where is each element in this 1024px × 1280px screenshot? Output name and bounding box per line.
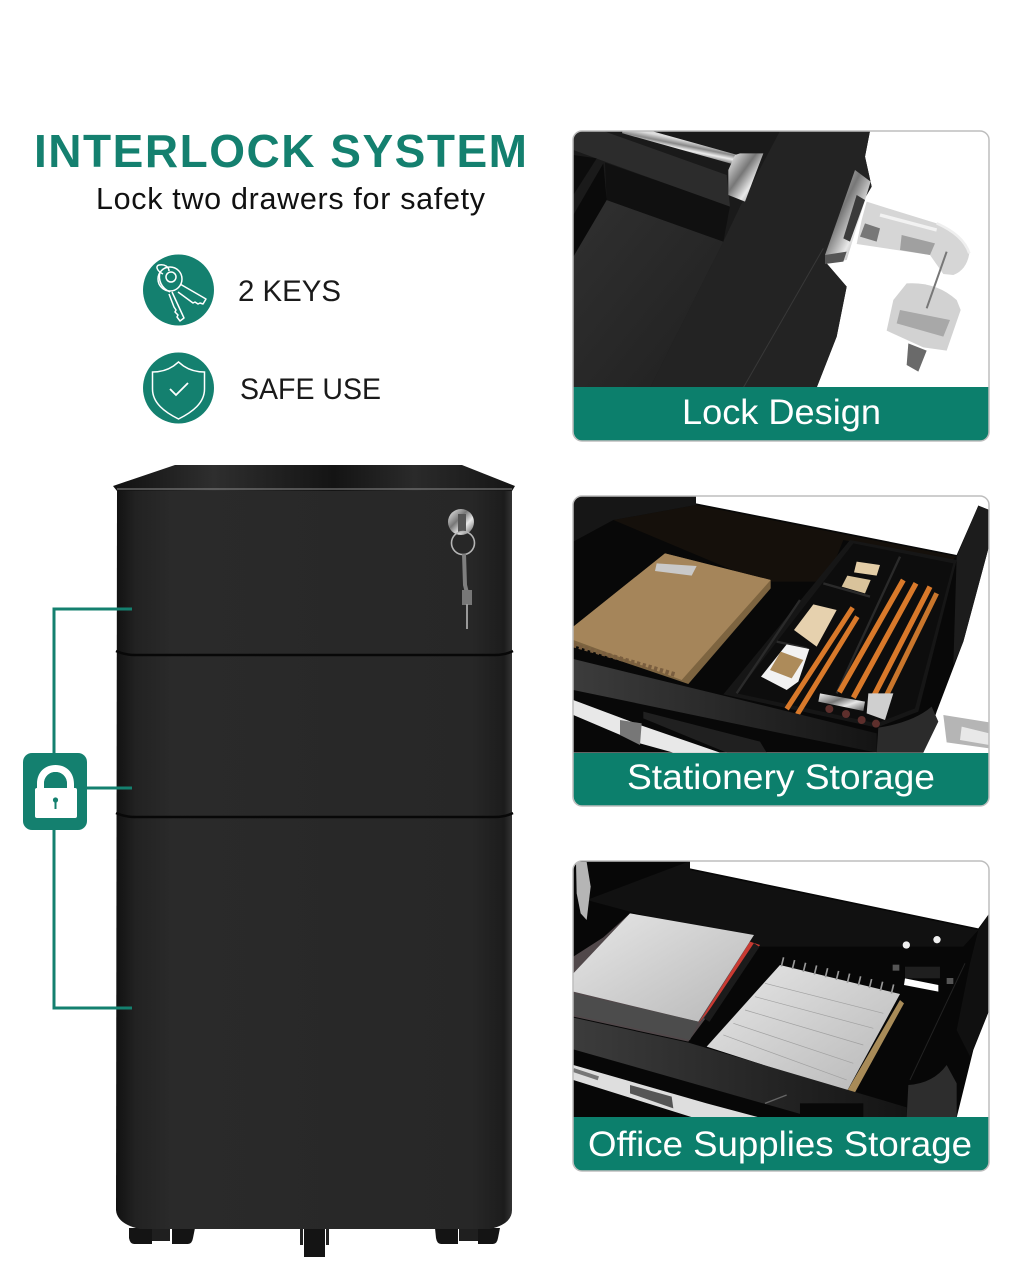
spiral notebook: [847, 1000, 904, 1092]
photo: drawer with office supplies: [574, 862, 988, 1117]
label: 2 keys: 2 KEYS: [238, 275, 341, 308]
caption bar: office supplies storage: [574, 1117, 989, 1171]
organizer tray: [723, 540, 957, 728]
photo: drawer with stationery: [574, 496, 988, 753]
title: INTERLOCK SYSTEM: [34, 125, 527, 177]
drawer front rim: [573, 659, 877, 753]
panel border: [573, 496, 989, 806]
feature: safe use: [143, 352, 381, 424]
photo: lock close-up: [574, 132, 970, 387]
caption bar: stationery storage: [574, 753, 989, 806]
panel: lock design: [573, 128, 989, 441]
casters: [129, 1228, 500, 1257]
icon: shield: [143, 352, 214, 424]
subtitle: Lock two drawers for safety: [96, 182, 486, 216]
cabinet lid: [113, 465, 515, 491]
panel: stationery storage: [573, 496, 989, 806]
icon: padlock badge: [23, 753, 87, 830]
lock and key: [448, 509, 474, 629]
filing cabinet: [113, 465, 515, 1257]
caption text: stationery storage: Stationery Storage: [627, 758, 935, 797]
drawer rim and slide: [573, 1018, 907, 1118]
bracket lines: [54, 609, 132, 1008]
panel border: [573, 131, 989, 441]
panel border: [573, 861, 989, 1171]
feature: 2 keys: [143, 254, 341, 326]
interlock connector: [23, 609, 132, 1008]
caption text: office supplies storage: Office Supplies Storage: [588, 1125, 972, 1164]
magazine: [573, 913, 760, 1042]
caption text: lock design: Lock Design: [682, 393, 881, 432]
panel: office supplies storage: [573, 861, 989, 1171]
label: safe use: SAFE USE: [240, 373, 381, 406]
icon: keys: [143, 254, 214, 326]
caption bar: lock design: [574, 387, 989, 441]
cabinet body: [116, 490, 512, 1229]
notebook: [573, 553, 771, 684]
drawer seams: [116, 651, 513, 817]
